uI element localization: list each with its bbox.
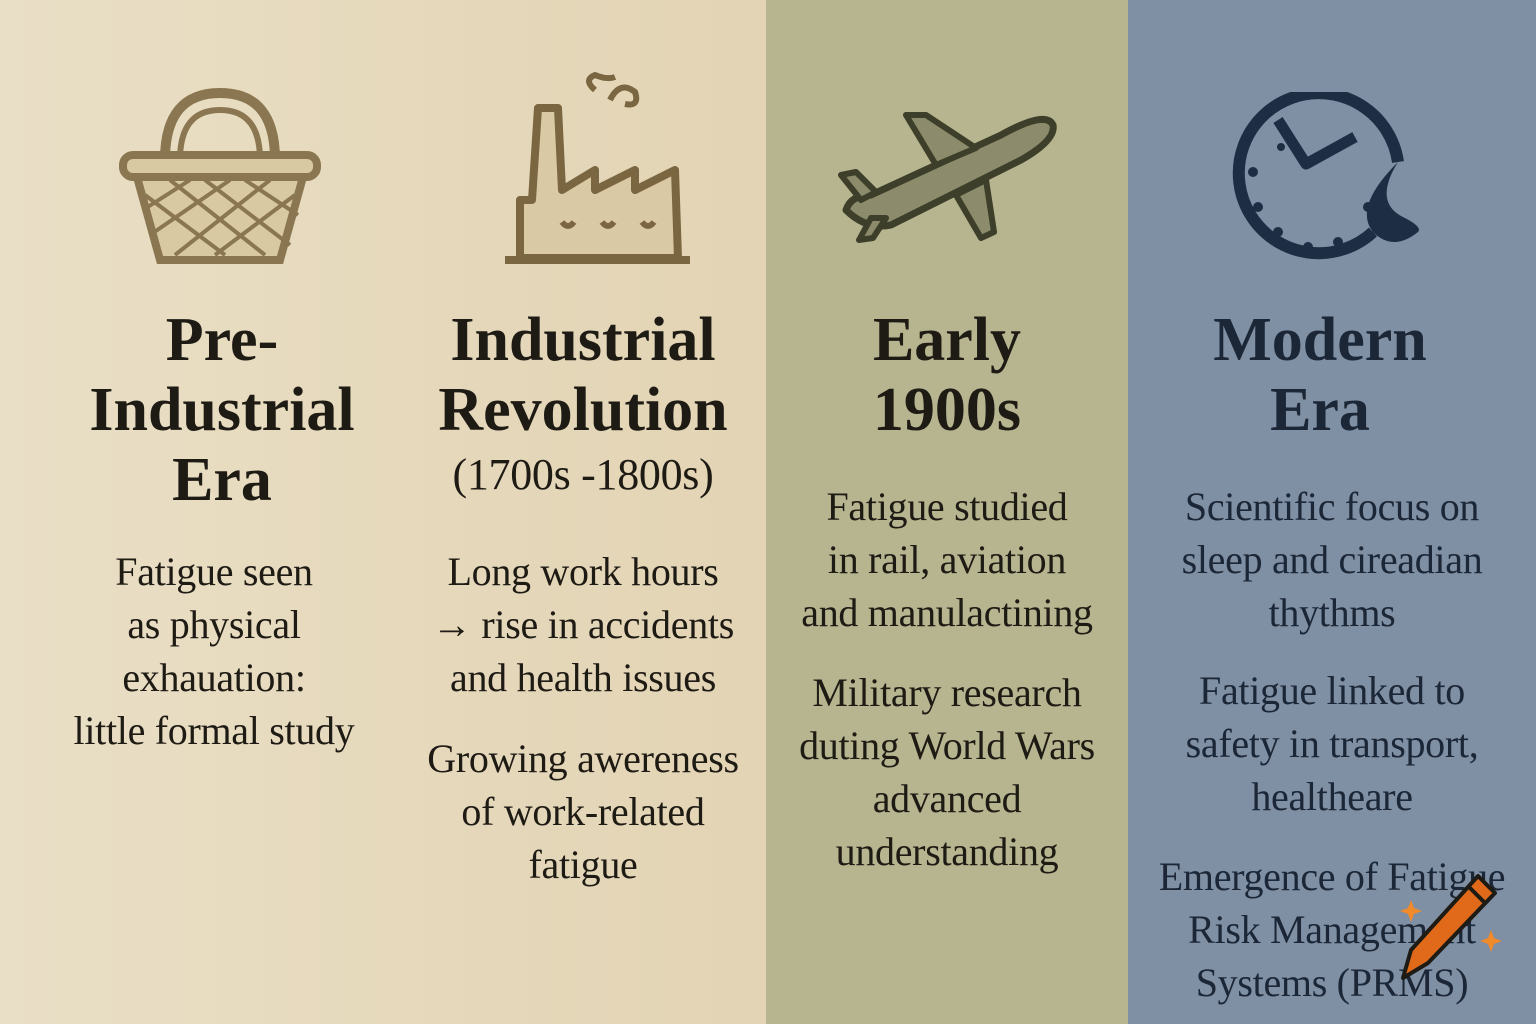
text block: understanding (836, 829, 1058, 874)
text block: → rise in accidents (432, 602, 734, 647)
text block: Fatigue seen (115, 549, 313, 594)
text block: Emergence of Fatigue (1159, 854, 1505, 899)
text block: Growing awereness (427, 736, 739, 781)
title: Pre- (166, 306, 278, 374)
panel: early 1900s (766, 0, 1128, 1024)
icon: factory (505, 72, 690, 264)
icon: plane (838, 112, 1057, 243)
text block (1159, 854, 1505, 1005)
panel: modern era (1128, 0, 1536, 1024)
title: Industrial (450, 306, 716, 374)
text block: Risk Management (1188, 907, 1476, 952)
text block: fatigue (529, 842, 637, 887)
text block (801, 484, 1093, 635)
text block: and health issues (450, 655, 716, 700)
text block (74, 549, 355, 753)
title: Revolution (438, 376, 728, 444)
text block: in rail, aviation (828, 537, 1066, 582)
text block (1186, 668, 1478, 819)
text block: safety in transport, (1186, 721, 1478, 766)
text block (1182, 484, 1482, 635)
text block: healtheare (1251, 774, 1413, 819)
title (89, 306, 355, 514)
text block: as physical (127, 602, 301, 647)
title: Era (1270, 376, 1370, 444)
text block: and manulactining (801, 590, 1093, 635)
title: Early (873, 306, 1021, 374)
title: 1900s (873, 376, 1021, 444)
text block: Long work hours (447, 549, 719, 594)
text block: thythms (1269, 590, 1395, 635)
text block: little formal study (74, 708, 354, 753)
date: (1700s -1800s) (452, 450, 714, 499)
panel: industrial revolution (400, 0, 766, 1024)
text block: sleep and cireadian (1182, 537, 1482, 582)
text block: Fatigue linked to (1199, 668, 1465, 713)
icon: basket (119, 88, 321, 264)
text block: Fatigue studied (826, 484, 1068, 529)
panel: pre-industrial era (0, 0, 400, 1024)
text block: Scientific focus on (1185, 484, 1479, 529)
text block: of work-related (461, 789, 705, 834)
text block: Military research (812, 670, 1082, 715)
text block (432, 549, 734, 700)
title (438, 306, 728, 444)
title (1213, 306, 1427, 444)
text block: duting World Wars (799, 723, 1095, 768)
text block (799, 670, 1095, 874)
title: Industrial (89, 376, 355, 444)
icon: crayon (1400, 874, 1502, 980)
text block (427, 736, 739, 887)
icon: clock (1232, 92, 1419, 260)
title: Modern (1213, 306, 1427, 374)
title (873, 306, 1021, 444)
text block: exhauation: (122, 655, 306, 700)
text block: Systems (PRMS) (1196, 960, 1468, 1005)
title: Era (172, 446, 272, 514)
text block: advanced (873, 776, 1021, 821)
